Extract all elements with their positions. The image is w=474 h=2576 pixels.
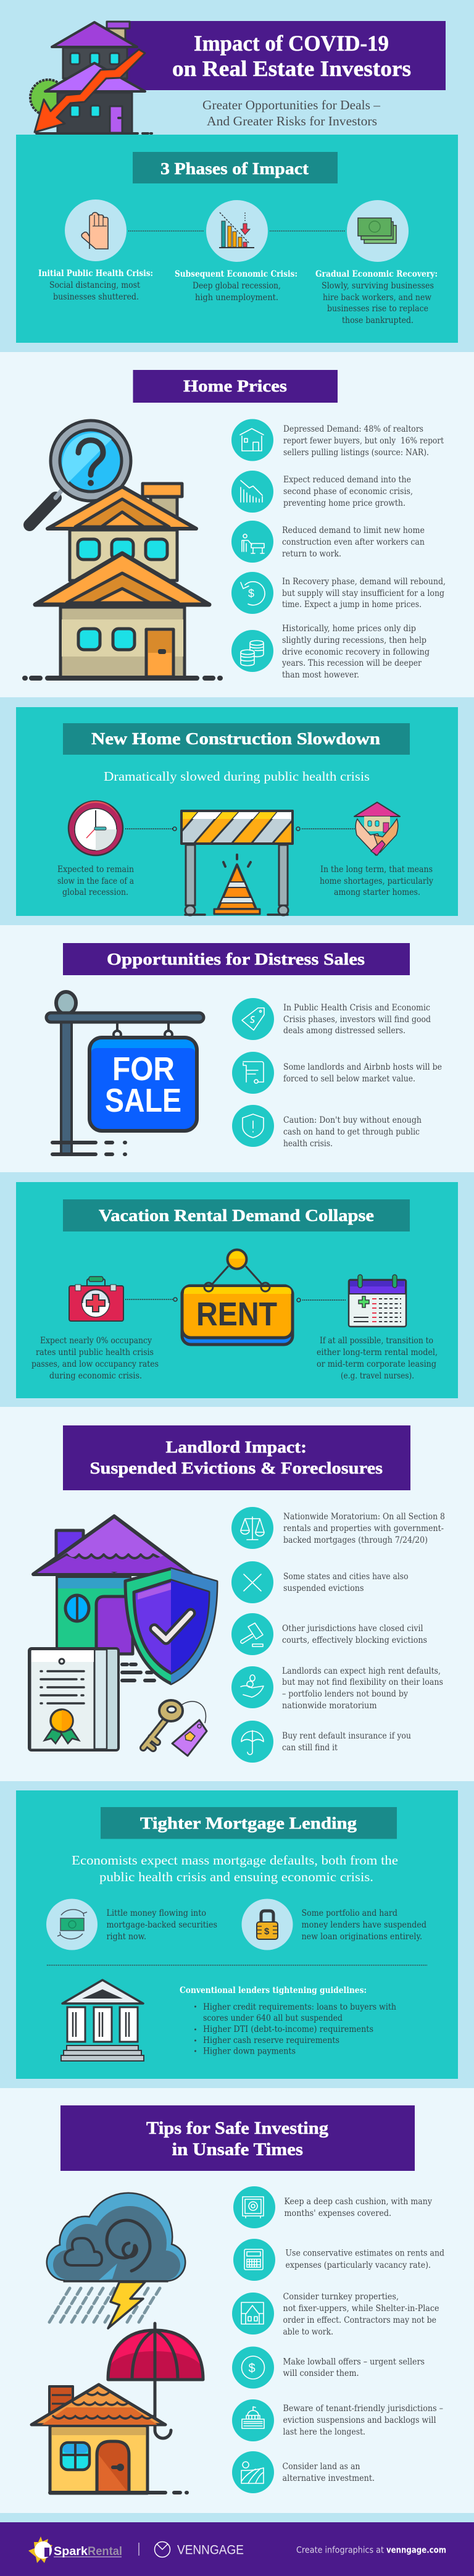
- item: turnkey properties: order in effect. Contractors may not be: [283, 2315, 436, 2325]
- item: turnkey properties: [232, 2292, 439, 2337]
- item: states and cities: Some states and cities have also: [283, 1572, 409, 1582]
- text: occupancy rates: rates until public health crisis: [36, 1348, 154, 1357]
- item: lowball offers: [232, 2347, 425, 2389]
- credit text: Create infographics at: [296, 2546, 384, 2556]
- item: rent defaults: Landlords can expect high rent defaults,: [282, 1666, 441, 1676]
- icon: rent sign: RENT: [196, 1296, 277, 1333]
- icon: stop hand: [65, 199, 127, 261]
- subheading: [72, 1853, 398, 1884]
- text: transition advice: either long-term rental model,: [317, 1348, 438, 1357]
- title banner: Impact of COVID-19: [194, 31, 389, 56]
- item: nationwide moratorium: rentals and properties with government-: [283, 1524, 444, 1533]
- icon: falling chart: [231, 471, 273, 513]
- text: long term home shortages: among starter homes.: [334, 887, 420, 897]
- text: long term home shortages: home shortages, particularly: [320, 876, 433, 886]
- item: conservative estimates: expenses (particularly vacancy rate).: [285, 2260, 431, 2270]
- item: lowball offers: Make lowball offers – urgent sellers: [283, 2357, 425, 2367]
- icon: warning shield: [232, 1105, 274, 1147]
- panel: 3 phases of impact: [16, 135, 458, 343]
- text: conventional lenders guidelines: Higher down payments: [203, 2047, 296, 2057]
- icon: barrier and cone: [180, 810, 294, 917]
- item: turnkey properties: able to work.: [283, 2327, 333, 2337]
- illustration: for sale sign: SALE: [105, 1082, 181, 1119]
- item: lowball offers: will consider them.: [283, 2368, 359, 2378]
- section: landlord impact: [0, 1407, 474, 1781]
- item: lenders suspended originations: Some portfolio and hard: [301, 1908, 397, 1918]
- item: cash cushion: Keep a deep cash cushion, with many: [284, 2197, 432, 2207]
- footer: [0, 2522, 474, 2576]
- icon: capitol building: [232, 2399, 274, 2441]
- heading: 3 phases of impact: [133, 152, 338, 183]
- item: turnkey properties: not fixer-uppers, while Shelter-in-Place: [283, 2304, 439, 2314]
- text: long term home shortages: [320, 865, 433, 897]
- icon: first aid kit: [69, 1277, 123, 1321]
- icon: houses with falling arrow: [30, 22, 152, 133]
- item: tenant friendly jurisdictions: [232, 2399, 443, 2441]
- section: opportunities for distress sales: [0, 925, 474, 1172]
- text: occupancy rates: [31, 1336, 159, 1381]
- header: [30, 21, 446, 133]
- item: historical context: years. This recession will be deeper: [281, 658, 422, 668]
- item: states and cities: suspended evictions: [283, 1584, 364, 1593]
- icon: hand with coins: [231, 1666, 273, 1708]
- item: rent default insurance: [231, 1721, 411, 1763]
- icon: dollar circle: $: [248, 2362, 256, 2375]
- heading: 3 phases of impact: 3 Phases of Impact: [160, 159, 309, 178]
- logo: SparkRental: [28, 2536, 122, 2563]
- item: cash cushion: months' expenses covered.: [284, 2209, 391, 2218]
- text: transition advice: (e.g. travel nurses).: [341, 1371, 414, 1381]
- illustration: storm cloud: [48, 2194, 185, 2328]
- heading: vacation rental demand collapse: [63, 1199, 410, 1231]
- icon: banknotes: [347, 200, 409, 262]
- item: rent defaults: [231, 1666, 443, 1711]
- text: expected to remain slow: global recession.: [62, 887, 128, 897]
- item: depressed demand: report fewer buyers, but only 16% report: [283, 436, 444, 446]
- item: cash cushion: [233, 2186, 432, 2228]
- heading: opportunities for distress sales: Opportunities for Distress Sales: [107, 950, 365, 968]
- item: mortgage backed securities: mortgage-backed securities: [106, 1920, 217, 1930]
- illustration: for sale sign: [46, 992, 204, 1155]
- phase connectors: [128, 230, 346, 232]
- item: new construction: Reduced demand to limit new home: [282, 526, 425, 535]
- icon: hands holding house: [354, 802, 400, 855]
- item: new construction: return to work.: [282, 549, 341, 559]
- item: nationwide moratorium: [231, 1507, 445, 1549]
- item: caution: health crisis.: [283, 1139, 333, 1149]
- heading: new home construction slowdown: [63, 723, 410, 755]
- icon: umbrella: [231, 1721, 273, 1763]
- subtitle: Greater Opportunities for Deals –: [202, 98, 380, 112]
- phase 3 text: Gradual Economic Recovery:: [315, 269, 438, 279]
- subheading: public health crisis and ensuing economic crisis.: [99, 1869, 373, 1884]
- icon: calendar: [349, 1275, 406, 1327]
- item: nationwide moratorium: Nationwide Moratorium: On all Section 8: [283, 1512, 445, 1522]
- text: conventional lenders guidelines: Higher cash reserve requirements: [203, 2036, 339, 2045]
- item: depressed demand: Depressed Demand: 48% of realtors: [283, 424, 423, 434]
- phase 2 text: Subsequent Economic Crisis:: [175, 269, 297, 279]
- phase 3 text: Slowly, surviving businesses: [322, 281, 434, 291]
- item: mortgage backed securities: right now.: [106, 1932, 146, 1942]
- item: lenders suspended originations: money lenders have suspended: [301, 1920, 426, 1930]
- phase 3 text: hire back workers, and new: [323, 293, 431, 303]
- item: caution: [232, 1105, 422, 1149]
- item: lenders suspended originations: new loan originations entirely.: [301, 1932, 422, 1942]
- item: depressed demand: [231, 419, 444, 461]
- subheading: Economists expect mass mortgage defaults, both from the: [72, 1853, 398, 1868]
- icon: safe: [233, 2186, 275, 2228]
- item: below market sales: [232, 1052, 442, 1094]
- credit text: venngage.com: [386, 2546, 446, 2556]
- phase 2 text: [175, 269, 297, 303]
- text: conventional lenders guidelines: Higher DTI (debt-to-income) requirements: [203, 2024, 373, 2034]
- logo: SparkRental: Rental: [88, 2545, 122, 2558]
- connectors: [125, 827, 355, 831]
- icon: dollar with arrow: [231, 572, 273, 614]
- icon: dollar circle: [232, 2347, 274, 2389]
- credit text: [296, 2546, 446, 2556]
- item: conservative estimates: [233, 2239, 444, 2281]
- item: civil courts: Other jurisdictions have closed civil: [282, 1624, 423, 1634]
- text: occupancy rates: passes, and low occupancy rates: [31, 1359, 159, 1369]
- icon: coin stacks: [231, 630, 273, 672]
- phase 3 text: those bankrupted.: [342, 316, 414, 325]
- item: recovery phase: time. Expect a jump in home prices.: [282, 600, 422, 610]
- icon: scales: [231, 1507, 273, 1549]
- text: long term home shortages: In the long term, that means: [320, 865, 433, 875]
- phase 2 text: high unemployment.: [195, 293, 278, 303]
- panel: vacation rental demand collapse: [16, 1182, 458, 1398]
- subheading: Dramatically slowed during public health crisis: [104, 769, 370, 784]
- item: rent default insurance: Buy rent default insurance if you: [282, 1731, 411, 1741]
- phase 1 text: businesses shuttered.: [53, 292, 139, 302]
- illustration: house under magnifier: [25, 421, 220, 678]
- item: land investment: Consider land as an: [283, 2462, 360, 2472]
- logo: Venngage: [154, 2542, 244, 2557]
- item: conservative estimates: Use conservative estimates on rents and: [285, 2248, 444, 2258]
- heading: landlord impact: Suspended Evictions & Foreclosures: [90, 1459, 383, 1477]
- item: rent defaults: but may not find flexibility on their loans: [282, 1677, 443, 1687]
- text: occupancy rates: during economic crisis.: [49, 1371, 142, 1381]
- phase 1 text: Initial Public Health Crisis:: [38, 269, 153, 279]
- heading: tighter mortgage lending: [101, 1807, 397, 1839]
- item: lenders suspended originations: [242, 1898, 426, 1950]
- item: below market sales: forced to sell below market value.: [283, 1074, 415, 1084]
- text: expected to remain slow: slow in the face of a: [57, 876, 134, 886]
- connectors: [125, 1298, 346, 1302]
- illustration: for sale sign: FOR: [112, 1051, 175, 1088]
- section: tips for safe investing: [0, 2088, 474, 2513]
- item: historical context: slightly during recessions, then help: [282, 636, 426, 645]
- icon: cross: [231, 1561, 273, 1603]
- item: second phase demand: preventing home price growth.: [283, 498, 405, 508]
- item: good deals: deals among distressed sellers.: [283, 1026, 405, 1036]
- text: conventional lenders guidelines: Conventional lenders tightening guidelines:: [180, 1986, 367, 1995]
- subtitle: And Greater Risks for Investors: [207, 114, 377, 128]
- phase 1 text: Social distancing, most: [49, 280, 141, 290]
- title banner: [123, 21, 446, 90]
- heading: new home construction slowdown: New Home Construction Slowdown: [91, 729, 380, 748]
- item: land investment: alternative investment.: [283, 2473, 375, 2483]
- item: second phase demand: second phase of economic crisis,: [283, 487, 413, 497]
- panel: new home construction slowdown: [16, 707, 458, 916]
- icon: farm land: [232, 2451, 274, 2493]
- item: caution: cash on hand to get through public: [283, 1127, 420, 1137]
- item: second phase demand: [231, 471, 413, 513]
- phase 2 text: Deep global recession,: [193, 281, 281, 291]
- text: transition advice: [317, 1336, 438, 1381]
- heading: home prices: Home Prices: [183, 377, 287, 395]
- item: tenant friendly jurisdictions: last here the longest.: [283, 2427, 365, 2437]
- phase 3 text: [315, 269, 438, 325]
- icon: calculator: [233, 2239, 275, 2281]
- item: rent defaults: – portfolio lenders not bound by: [282, 1689, 408, 1699]
- icon: clock: [69, 801, 123, 855]
- heading: tips for safe investing: [60, 2105, 415, 2171]
- icon: certificate scroll: [232, 1052, 274, 1094]
- item: good deals: [232, 998, 431, 1040]
- heading: tighter mortgage lending: Tighter Mortgage Lending: [140, 1814, 357, 1832]
- item: mortgage backed securities: [46, 1898, 217, 1950]
- text: occupancy rates: Expect nearly 0% occupancy: [40, 1336, 152, 1346]
- logo: SparkRental: Spark: [54, 2545, 88, 2558]
- text: conventional lenders guidelines: Higher credit requirements: loans to buyers with: [203, 2002, 396, 2012]
- item: second phase demand: Expect reduced demand into the: [283, 475, 411, 485]
- heading: landlord impact: Landlord Impact:: [165, 1438, 307, 1456]
- icon: falling bar chart: [206, 200, 268, 262]
- illustration: house under umbrella: [31, 2323, 203, 2493]
- heading: tips for safe investing: Tips for Safe Investing: [146, 2118, 329, 2138]
- item: civil courts: courts, effectively blocking evictions: [282, 1635, 427, 1645]
- icon: money cycle: [46, 1898, 98, 1950]
- item: historical context: than most however.: [282, 670, 359, 680]
- icon: worker with barrier: [231, 521, 273, 563]
- item: historical context: [231, 624, 430, 680]
- item: good deals: Crisis phases, investors will find good: [283, 1015, 431, 1025]
- item: states and cities: [231, 1561, 409, 1603]
- item: recovery phase: but supply will stay insufficient for a long: [282, 589, 444, 598]
- item: caution: Caution: Don't buy without enough: [283, 1115, 422, 1125]
- logo: Venngage: VENNGAGE: [177, 2543, 244, 2557]
- icon: dollar with arrow: $: [248, 587, 254, 600]
- illustration: house, shield, contract and key: [29, 1516, 217, 1756]
- item: mortgage backed securities: Little money flowing into: [106, 1908, 206, 1918]
- icon: padlock: $: [264, 1926, 270, 1937]
- panel: tighter mortgage lending: [16, 1790, 458, 2079]
- text: expected to remain slow: [57, 865, 134, 897]
- item: rent defaults: nationwide moratorium: [282, 1701, 377, 1711]
- icon: house: [231, 419, 273, 461]
- item: rent default insurance: can still find it: [282, 1743, 338, 1753]
- item: civil courts: [231, 1613, 427, 1655]
- icon: bank: [61, 1980, 144, 2061]
- item: nationwide moratorium: backed mortgages (through 7/24/20): [283, 1535, 428, 1545]
- item: new construction: [231, 521, 425, 563]
- heading: opportunities for distress sales: [63, 943, 410, 975]
- item: tenant friendly jurisdictions: eviction suspensions and backlogs will: [283, 2415, 436, 2425]
- icon: gavel: [231, 1613, 273, 1655]
- text: transition advice: If at all possible, transition to: [320, 1336, 433, 1346]
- heading: landlord impact: [63, 1425, 410, 1490]
- phase 1 text: [38, 269, 153, 302]
- item: land investment: [232, 2451, 375, 2493]
- item: historical context: drive economic recovery in following: [282, 647, 430, 657]
- phase 3 text: businesses rise to replace: [327, 304, 428, 314]
- text: expected to remain slow: Expected to remain: [57, 865, 134, 875]
- icon: house in frame: [232, 2293, 274, 2335]
- item: recovery phase: In Recovery phase, demand will rebound,: [282, 577, 446, 587]
- text: transition advice: or mid-term corporate leasing: [317, 1359, 436, 1369]
- item: below market sales: Some landlords and Airbnb hosts will be: [283, 1062, 442, 1072]
- item: recovery phase: [231, 572, 446, 614]
- title banner: on Real Estate Investors: [172, 56, 411, 81]
- item: new construction: construction even after workers can: [282, 537, 425, 547]
- item: tenant friendly jurisdictions: Beware of tenant-friendly jurisdictions –: [283, 2404, 443, 2414]
- text: conventional lenders guidelines: scores under 640 all but suspended: [203, 2013, 343, 2023]
- heading: vacation rental demand collapse: Vacation Rental Demand Collapse: [99, 1206, 374, 1225]
- item: historical context: Historically, home prices only dip: [282, 624, 416, 634]
- subtitle: [202, 98, 380, 128]
- heading: home prices: [133, 370, 338, 403]
- item: turnkey properties: Consider turnkey properties,: [283, 2292, 399, 2302]
- item: good deals: In Public Health Crisis and Economic: [283, 1003, 430, 1013]
- section: home prices: [0, 352, 474, 697]
- icon: padlock: [242, 1898, 293, 1950]
- icon: rent sign: [182, 1250, 293, 1345]
- heading: tips for safe investing: in Unsafe Times: [172, 2139, 303, 2159]
- item: depressed demand: sellers pulling listings (source: NAR).: [283, 448, 429, 458]
- icon: price tag: [232, 998, 274, 1040]
- text: conventional lenders guidelines: [180, 1986, 396, 2057]
